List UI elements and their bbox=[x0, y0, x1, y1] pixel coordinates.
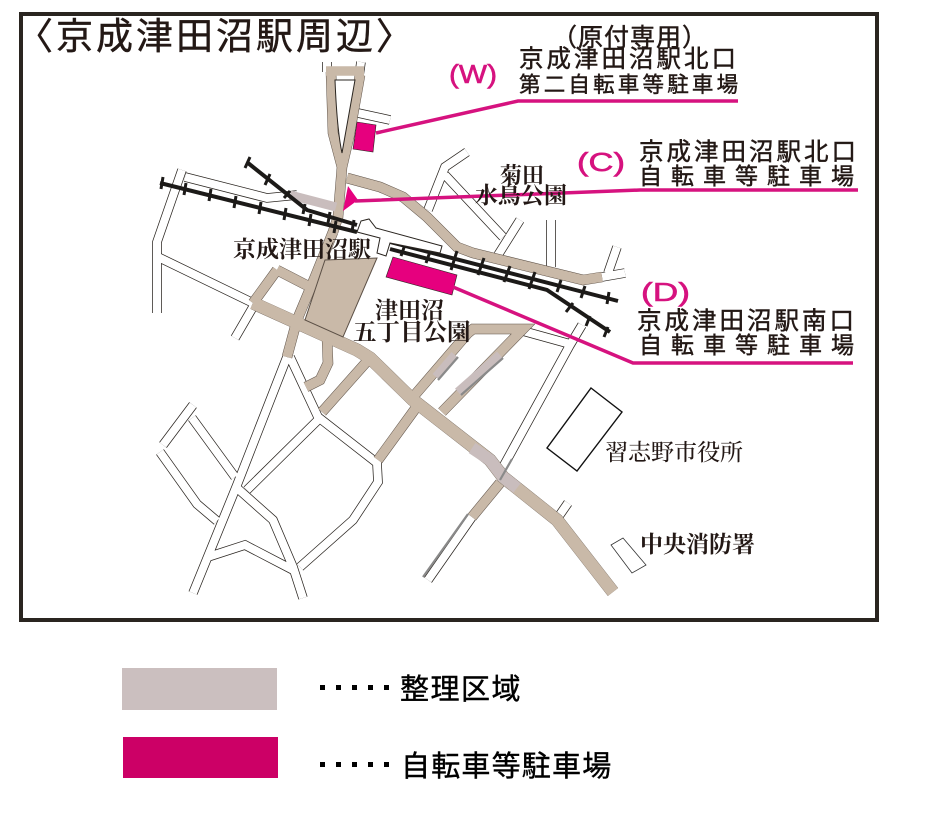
label W bbox=[449, 24, 741, 97]
fire station outline bbox=[611, 538, 646, 573]
label W: (W) bbox=[449, 59, 497, 89]
label D: 京成津田沼駅南口 bbox=[637, 307, 857, 335]
map frame bbox=[21, 14, 877, 620]
label W: （原付専用） bbox=[552, 24, 708, 52]
railway bbox=[160, 157, 618, 337]
legend: adjustment zone text bbox=[320, 673, 522, 706]
legend: parking swatch bbox=[123, 737, 278, 778]
parking D bbox=[386, 257, 457, 295]
legend: adjustment zone swatch bbox=[122, 668, 277, 710]
label C bbox=[577, 138, 863, 189]
map labels: 津田沼 bbox=[375, 298, 444, 323]
map labels: 京成津田沼駅 bbox=[233, 237, 371, 262]
white streets bbox=[157, 62, 625, 598]
label W: 京成津田沼駅北口 bbox=[519, 45, 739, 73]
map: streets bbox=[157, 62, 625, 598]
map labels: 習志野市役所 bbox=[605, 440, 743, 465]
label C: (C) bbox=[577, 147, 625, 177]
map labels bbox=[233, 163, 755, 557]
park block bbox=[305, 258, 377, 337]
legend: parking text: 自転車等駐車場 bbox=[401, 750, 612, 783]
label D bbox=[637, 277, 863, 358]
north fork inner island bbox=[335, 80, 355, 153]
legend: adjustment zone text: 整理区域 bbox=[400, 673, 522, 706]
title: 〈京成津田沼駅周辺〉 bbox=[16, 16, 416, 57]
tan streets casing bbox=[253, 72, 613, 592]
station building bbox=[357, 219, 442, 256]
adjustment zone segments bbox=[290, 195, 517, 488]
parking W bbox=[353, 122, 376, 152]
parking C bbox=[343, 186, 358, 211]
map labels: 水鳥公園 bbox=[475, 183, 567, 208]
label D: (D) bbox=[641, 277, 690, 307]
map labels: 五丁目公園 bbox=[353, 319, 470, 346]
city hall outline bbox=[547, 388, 622, 471]
grey road edges bbox=[423, 357, 512, 577]
label C: 自転車等駐車場 bbox=[639, 163, 863, 189]
label W: 第二自転車等駐車場 bbox=[519, 73, 741, 97]
map labels: 菊田 bbox=[500, 163, 544, 188]
label D: 自転車等駐車場 bbox=[639, 332, 863, 358]
map labels: 中央消防署 bbox=[640, 532, 755, 557]
label C: 京成津田沼駅北口 bbox=[639, 138, 859, 166]
leader lines bbox=[355, 101, 858, 363]
